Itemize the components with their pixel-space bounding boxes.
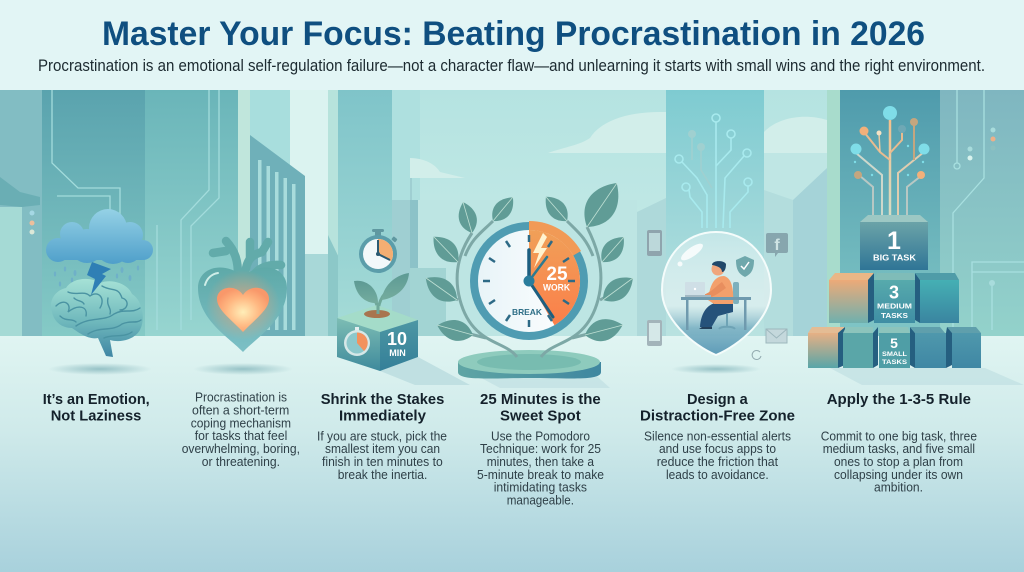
facebook icon: f bbox=[774, 237, 780, 254]
status dots right bbox=[968, 128, 996, 286]
column 3: shrink the stakes body: If you are stuck, pick the bbox=[317, 429, 447, 443]
column 1: emotion heading bbox=[43, 391, 150, 425]
building with stripes bbox=[250, 135, 305, 336]
cube: MIN bbox=[389, 348, 406, 358]
column 2: emotion body bbox=[182, 391, 300, 469]
background: city scene bbox=[0, 90, 1024, 336]
column 1: emotion heading: Not Laziness bbox=[51, 408, 141, 425]
column 3: shrink the stakes body: smallest item you can bbox=[325, 442, 440, 456]
clock face bbox=[478, 230, 580, 332]
icon: storm cloud over brain bbox=[46, 209, 153, 375]
shield bbox=[736, 256, 754, 277]
cube bbox=[337, 303, 418, 371]
column 4: 25 minutes body: intimidating tasks bbox=[494, 481, 587, 495]
column 2: emotion body: for tasks that feel bbox=[195, 429, 287, 443]
leaves bbox=[420, 175, 639, 345]
column 6: 1-3-5 rule body: collapsing under its own bbox=[834, 468, 963, 482]
clock label: 25 work: WORK bbox=[543, 282, 570, 292]
column 3: shrink the stakes body: finish in ten minutes to bbox=[322, 455, 443, 469]
small task blocks: SMALL bbox=[882, 351, 907, 358]
column 5: distraction-free body: leads to avoidance. bbox=[666, 468, 769, 482]
small task blocks bbox=[808, 327, 981, 368]
bubble bbox=[662, 232, 771, 355]
header background bbox=[0, 0, 1024, 90]
icon: 1-3-5 block pyramid bbox=[808, 215, 981, 368]
column 5: distraction-free body: Silence non-essential alerts bbox=[644, 429, 791, 443]
floor shadows bbox=[380, 357, 1024, 388]
floor shadow under bubble bbox=[671, 364, 761, 374]
brain bbox=[51, 279, 143, 357]
column 4: 25 minutes body: Technique: work for 25 bbox=[480, 442, 601, 456]
floor bbox=[0, 336, 1024, 572]
column 5: distraction-free heading: Distraction-Free Zone bbox=[640, 408, 795, 425]
column 2: emotion body: often a short-term bbox=[192, 403, 289, 417]
cube label: 10 bbox=[387, 329, 407, 349]
icon: orange and teal circuit tree above tasks bbox=[850, 106, 930, 215]
column 3: shrink the stakes heading: Shrink the Stakes bbox=[321, 391, 444, 408]
column 5: distraction-free body: reduce the friction that bbox=[657, 455, 778, 469]
circuit lines left bbox=[52, 90, 219, 330]
work sector bbox=[529, 230, 580, 325]
inner glowing heart bbox=[217, 288, 269, 332]
column 6: 1-3-5 rule body: Commit to one big task, three bbox=[821, 429, 977, 443]
icon: circuit tree above focus bubble bbox=[675, 114, 752, 228]
floor shadow under brain bbox=[48, 363, 152, 375]
icon: distraction icons around bubble bbox=[647, 230, 788, 359]
column 6: 1-3-5 rule body: ones to stop a plan from bbox=[834, 455, 963, 469]
column 3: shrink the stakes body bbox=[317, 429, 447, 482]
column 4: 25 minutes body: Use the Pomodoro bbox=[491, 429, 590, 443]
clock label: break: BREAK bbox=[512, 307, 543, 317]
phone bottom bbox=[647, 320, 662, 346]
column 5: distraction-free body: and use focus apps to bbox=[659, 442, 776, 456]
clock hands bbox=[524, 250, 553, 317]
rain bbox=[54, 266, 139, 286]
laptop bbox=[685, 282, 711, 297]
column 4: 25 minutes body: 5-minute break to make bbox=[477, 468, 604, 482]
bubble highlight bbox=[679, 241, 705, 263]
lightning bolt bbox=[87, 262, 111, 295]
clock ring orange arc bbox=[529, 221, 581, 281]
column 3: shrink the stakes heading: Immediately bbox=[339, 408, 427, 425]
icon: stopwatch, sprout and 10 min cube bbox=[337, 229, 418, 371]
status dots left bbox=[30, 210, 34, 234]
cube stopwatch bbox=[344, 327, 370, 356]
column 5: distraction-free heading: Design a bbox=[687, 391, 748, 408]
column 6: 1-3-5 rule heading: Apply the 1-3-5 Rule bbox=[827, 391, 971, 408]
icon: pomodoro clock with vines bbox=[420, 175, 639, 378]
column 1: emotion heading: It’s an Emotion, bbox=[43, 391, 150, 408]
icon: heart bbox=[193, 241, 293, 375]
clouds bbox=[410, 112, 827, 178]
clock ring bbox=[470, 222, 588, 340]
column 3: shrink the stakes heading bbox=[321, 391, 444, 425]
small task blocks: TASKS bbox=[882, 359, 908, 366]
medium task blocks: MEDIUM bbox=[877, 302, 912, 310]
refresh icon bbox=[752, 350, 761, 359]
chair bbox=[719, 282, 739, 329]
mail icon bbox=[766, 329, 787, 343]
column 6: 1-3-5 rule body bbox=[821, 429, 977, 495]
clock label: 25 work bbox=[543, 264, 570, 292]
medium task blocks: 3 bbox=[889, 282, 899, 302]
pedestal bbox=[458, 350, 601, 378]
column 4: 25 minutes body bbox=[477, 429, 604, 508]
phone top bbox=[647, 230, 662, 256]
column 6: 1-3-5 rule body: medium tasks, and five small bbox=[823, 442, 975, 456]
icon: focus bubble with person at desk bbox=[662, 232, 771, 374]
column 5: distraction-free body bbox=[644, 429, 791, 482]
column 4: 25 minutes heading: 25 Minutes is the bbox=[480, 391, 601, 408]
medium task blocks: TASKS bbox=[881, 311, 908, 320]
clock ticks bbox=[483, 235, 575, 327]
big task block bbox=[860, 215, 928, 270]
leaf midribs bbox=[426, 183, 633, 335]
lightning icon bbox=[533, 233, 547, 268]
column 2: emotion body: Procrastination is bbox=[195, 391, 287, 405]
column 6: 1-3-5 rule body: ambition. bbox=[874, 481, 923, 495]
column 4: 25 minutes body: minutes, then take a bbox=[487, 455, 594, 469]
column 3: shrink the stakes body: break the inertia. bbox=[338, 468, 427, 482]
heart glow bbox=[206, 270, 280, 340]
floor shadow under heart bbox=[193, 363, 293, 375]
title: Master Your Focus: Beating Procrastination in 2026 bbox=[102, 15, 925, 53]
medium task blocks bbox=[829, 273, 959, 323]
cloud bbox=[46, 209, 153, 264]
column 5: distraction-free heading bbox=[640, 391, 795, 425]
person bbox=[699, 261, 733, 329]
heart body bbox=[198, 267, 287, 352]
column 4: 25 minutes heading: Sweet Spot bbox=[500, 408, 581, 425]
column 2: emotion body: overwhelming, boring, bbox=[182, 442, 300, 456]
heart highlight bbox=[205, 273, 218, 285]
desk bbox=[681, 297, 751, 330]
vessels bbox=[213, 241, 281, 280]
clock label: 25 work: 25 bbox=[546, 264, 568, 285]
column 4: 25 minutes body: manageable. bbox=[507, 494, 574, 508]
big task block: 1 bbox=[887, 227, 901, 255]
facebook icon bbox=[766, 233, 788, 257]
column 2: emotion body: coping mechanism bbox=[191, 416, 291, 430]
column 2: emotion body: or threatening. bbox=[202, 455, 280, 469]
stopwatch bbox=[359, 229, 398, 273]
vines bbox=[440, 221, 618, 357]
big task block: BIG TASK bbox=[873, 252, 917, 262]
sprout bbox=[354, 273, 409, 314]
small task blocks: 5 bbox=[890, 335, 898, 351]
circuit lines right bbox=[953, 90, 1024, 330]
column 4: 25 minutes heading bbox=[480, 391, 601, 425]
